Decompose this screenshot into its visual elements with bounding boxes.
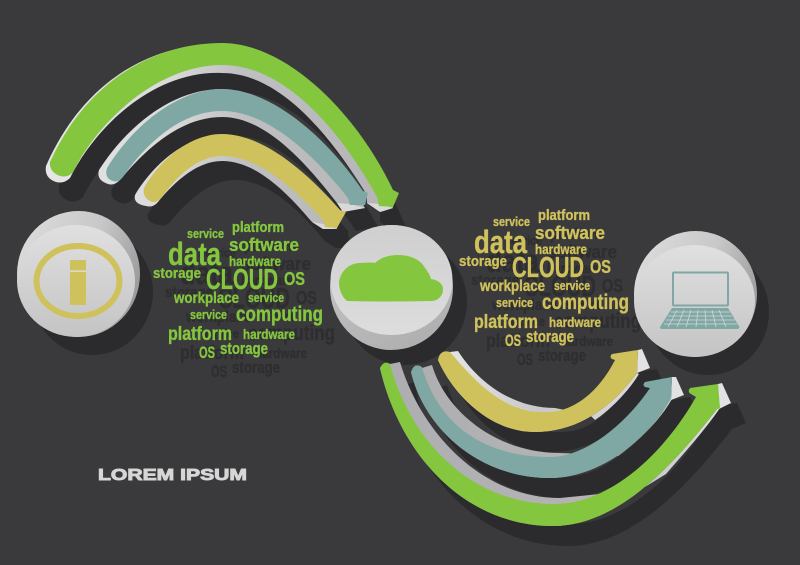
arrow: yellow bottom — [438, 349, 650, 432]
word cloud shadow: left: platform — [180, 343, 244, 364]
word cloud: yellow: service — [496, 295, 533, 310]
word cloud: yellow: service — [554, 278, 590, 293]
arrow: teal top — [98, 89, 368, 212]
word cloud shadow: left: computing — [248, 322, 335, 345]
word cloud shadow: right: platform — [550, 226, 602, 243]
word cloud: yellow: service — [493, 214, 530, 229]
word cloud: green: platform — [232, 219, 284, 236]
shadows of top arrows — [59, 63, 406, 248]
word cloud shadow: right: service — [566, 297, 602, 312]
word cloud: green: software — [229, 235, 299, 255]
laptop button — [634, 231, 757, 357]
arrow: green top — [46, 43, 399, 212]
bottom arrows — [380, 349, 746, 546]
word cloud: green: storage — [153, 265, 201, 282]
word cloud shadow: right: hardware — [561, 333, 613, 349]
word cloud shadow: left: CLOUD — [218, 283, 290, 315]
arrow: green bottom — [380, 362, 731, 526]
word cloud shadow: left: OS — [211, 362, 227, 381]
word cloud shadow: left: storage — [165, 284, 213, 301]
word cloud shadow: left: data — [180, 255, 233, 291]
word cloud: yellow: CLOUD — [512, 252, 584, 284]
word cloud: yellow: workplace — [479, 278, 545, 295]
word cloud shadow: right: workplace — [491, 297, 557, 314]
word cloud: yellow: storage — [526, 327, 574, 346]
arrow: teal bottom — [411, 365, 684, 478]
word cloud shadow: right: storage — [471, 272, 519, 289]
word cloud: green — [153, 219, 323, 362]
word cloud: green: workplace — [173, 290, 239, 307]
icon: cloud — [339, 255, 443, 302]
cloud button — [330, 225, 453, 350]
arrow: yellow top — [135, 134, 346, 229]
word cloud: yellow: computing — [542, 291, 629, 314]
icon: info — [36, 246, 120, 316]
word cloud: yellow — [459, 207, 629, 350]
word cloud: yellow: OS — [590, 257, 611, 277]
word cloud shadow: right: platform — [486, 331, 550, 352]
word cloud shadow: left: storage — [232, 358, 280, 377]
word cloud shadow: left: platform — [244, 238, 296, 255]
word cloud: yellow: platform — [538, 207, 590, 224]
word cloud: green: service — [190, 307, 227, 322]
word cloud: green: data — [168, 236, 221, 272]
word cloud shadow: right: hardware — [547, 260, 599, 276]
word cloud shadow: left: service — [202, 326, 239, 341]
word cloud shadow: left: software — [241, 254, 311, 274]
word cloud: yellow: software — [535, 223, 605, 243]
word cloud shadow: right: storage — [538, 346, 586, 365]
word cloud shadow: left: hardware — [241, 272, 293, 288]
circle shadows — [31, 229, 769, 375]
word cloud: green: OS — [284, 269, 305, 289]
word cloud shadow: right: software — [547, 242, 617, 262]
word cloud shadow: right: OS — [602, 276, 623, 296]
word cloud shadow: right: OS — [517, 350, 533, 369]
word cloud: green: service — [248, 290, 284, 305]
info button — [17, 211, 140, 337]
word cloud shadow: left: OS — [296, 288, 317, 308]
word cloud shadow: left: service — [199, 245, 236, 260]
word cloud shadow: right — [471, 226, 641, 369]
word cloud: green: CLOUD — [206, 264, 278, 296]
word cloud shadow: right: data — [486, 243, 539, 279]
word cloud: yellow: hardware — [535, 241, 587, 257]
shadows of bottom arrows — [395, 369, 746, 546]
caption: LOREM IPSUM — [98, 467, 247, 484]
word cloud shadow: right: CLOUD — [524, 271, 596, 303]
word cloud: green: platform — [168, 324, 232, 345]
word cloud: green: storage — [220, 339, 268, 358]
word cloud: green: hardware — [229, 253, 281, 269]
word cloud: green: hardware — [243, 326, 295, 342]
word cloud: green: OS — [199, 343, 215, 362]
icon: laptop — [660, 272, 740, 329]
word cloud shadow: left: hardware — [255, 345, 307, 361]
word cloud: yellow: data — [474, 224, 527, 260]
word cloud shadow: right: computing — [554, 310, 641, 333]
word cloud: yellow: OS — [505, 331, 521, 350]
word cloud shadow: left: workplace — [185, 309, 251, 326]
word cloud: green: computing — [236, 303, 323, 326]
word cloud shadow: right: service — [508, 314, 545, 329]
word cloud: green: service — [187, 226, 224, 241]
word cloud: yellow: storage — [459, 253, 507, 270]
word cloud shadow: left — [165, 238, 335, 381]
word cloud shadow: left: service — [260, 309, 296, 324]
top arrows — [46, 43, 406, 248]
word cloud: yellow: platform — [474, 312, 538, 333]
word cloud shadow: right: service — [505, 233, 542, 248]
word cloud: yellow: hardware — [549, 314, 601, 330]
